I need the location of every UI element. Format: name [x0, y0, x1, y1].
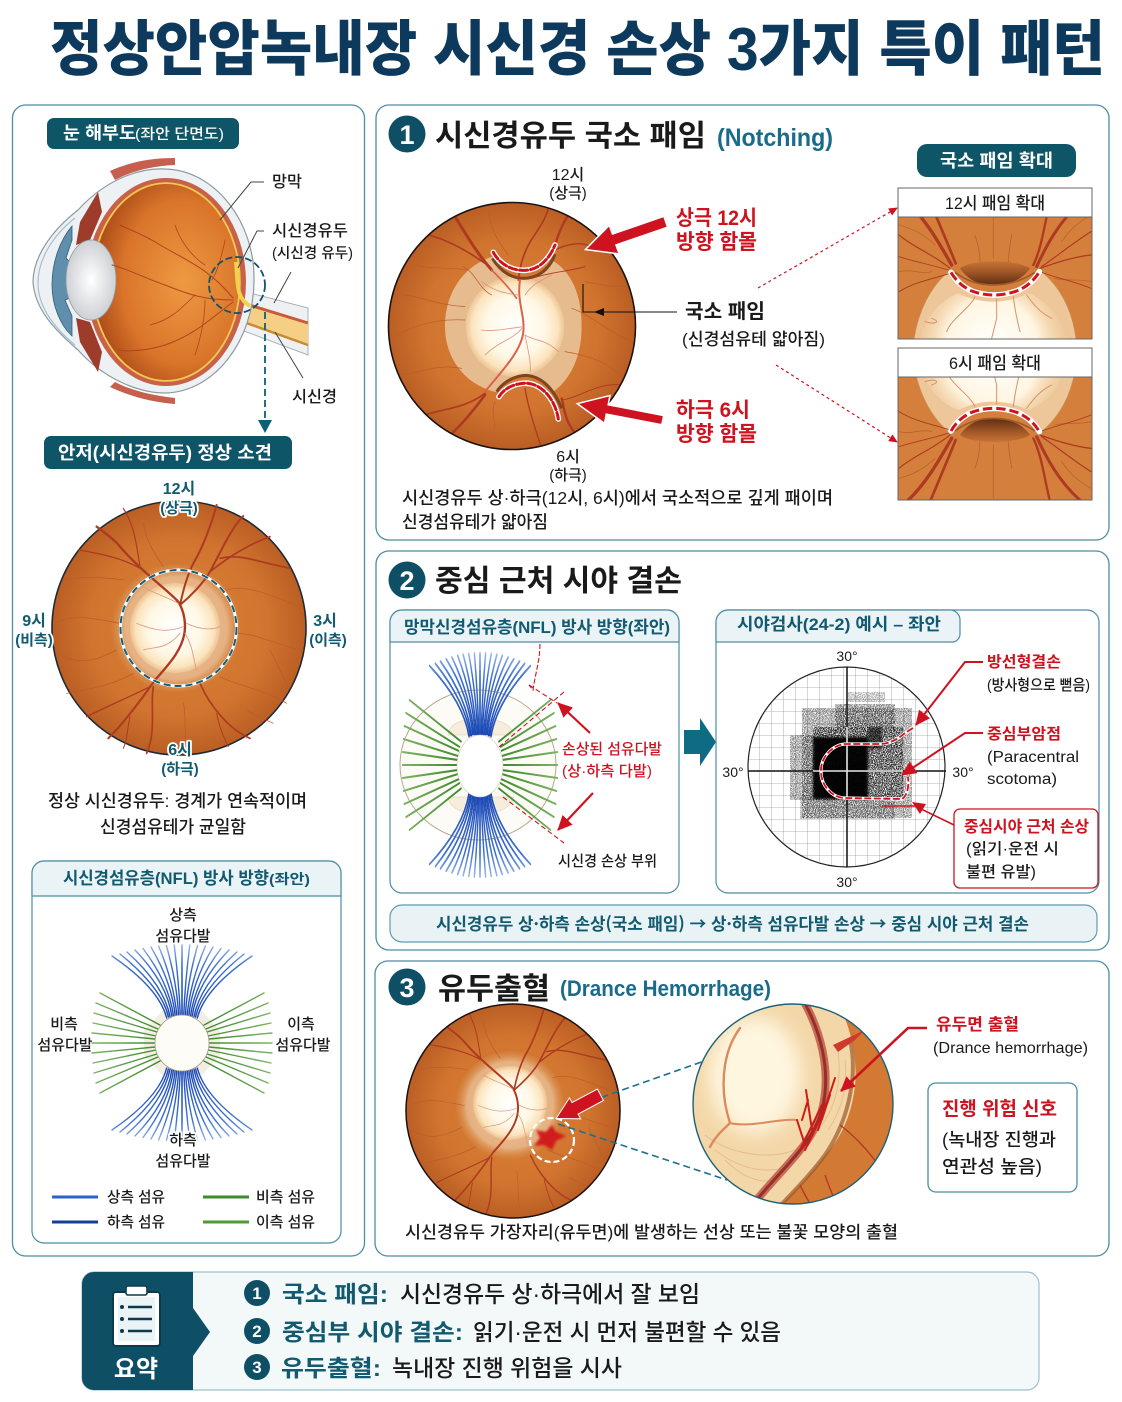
summary row 2: 읽기·운전 시 먼저 불편할 수 있음 — [473, 1319, 781, 1345]
callouts: anatomy labels: 망막 — [272, 173, 302, 191]
text: notch description — [402, 488, 833, 532]
heading: eye anatomy: 눈 해부도 — [63, 123, 136, 143]
icon: clipboard checklist — [113, 1286, 160, 1346]
callout: paracentral scotoma — [902, 725, 1079, 788]
summary row 3: 녹내장 진행 위험을 시사 — [392, 1355, 622, 1381]
callout: upper notch: 상극 12시 — [676, 207, 757, 230]
callouts: anatomy labels: 시신경유두 — [272, 222, 348, 240]
callouts: anatomy labels: 시신경 — [292, 388, 337, 406]
diagram: damaged fibers — [400, 644, 564, 877]
legend: 상측 섬유 — [107, 1189, 165, 1206]
heading 1 — [388, 116, 833, 153]
fan labels: 비측 — [50, 1016, 78, 1033]
clock labels: 6시 — [168, 742, 192, 759]
callout: near-central damage: 중심시야 근처 손상 — [964, 818, 1089, 836]
heading 1: 시신경유두 국소 패임 — [435, 120, 706, 153]
clock labels: (비측) — [15, 632, 53, 649]
callout: hemorrhage label: (Drance hemorrhage) — [933, 1040, 1088, 1057]
clock labels: 9시 — [22, 613, 46, 630]
field axis labels: 30° — [836, 648, 858, 664]
labels: damaged bundles: (상·하측 다발) — [562, 763, 652, 780]
clock labels: 6시 — [556, 449, 580, 466]
callout: focal notch: (신경섬유테 얇아짐) — [682, 330, 825, 349]
heading: notch zoom: 국소 패임 확대 — [940, 151, 1053, 171]
legend: 이측 섬유 — [256, 1214, 315, 1231]
callout: upper notch — [676, 207, 757, 254]
arrow: fibers to field — [684, 718, 716, 766]
legend: 하측 섬유 — [107, 1214, 165, 1231]
callout: lower notch: 방향 함몰 — [676, 423, 757, 446]
fan labels: 상측 — [169, 907, 197, 924]
callout: paracentral scotoma: 중심부암점 — [987, 725, 1061, 743]
clock labels: 12시 — [552, 167, 584, 184]
callout: near-central damage: 불편 유발) — [966, 863, 1036, 881]
callout: progression risk: (녹내장 진행과 — [942, 1130, 1056, 1150]
heading: eye anatomy: (좌안 단면도) — [135, 126, 224, 143]
fundus: normal optic disc — [52, 501, 306, 755]
fan labels: 하측 — [169, 1132, 197, 1149]
sub-panel: NFL damage — [390, 610, 679, 893]
clock labels: (상극) — [549, 185, 587, 202]
arrows: damaged bundles — [558, 703, 593, 830]
text: normal fundus description: 신경섬유테가 균일함 — [100, 817, 246, 837]
callouts: anatomy labels — [220, 173, 353, 406]
callouts: anatomy labels: (시신경 유두) — [272, 245, 353, 262]
panel 1: focal notching — [376, 105, 1109, 540]
heading 3: (Drance Hemorrhage) — [560, 976, 771, 1001]
callout: paracentral scotoma: (Paracentral — [987, 749, 1079, 766]
sub-panel: NFL damage: 망막신경섬유층(NFL) 방사 방향(좌안) — [404, 618, 670, 637]
clock labels: (하극) — [161, 761, 199, 778]
summary row 2 — [244, 1318, 781, 1345]
arrow: hemorrhage — [557, 1090, 603, 1118]
summary row 2: 중심부 시야 결손: — [282, 1319, 463, 1345]
summary row 1: 국소 패임: — [282, 1281, 388, 1307]
fundus: notched disc — [388, 202, 636, 450]
labels: damaged bundles — [558, 741, 662, 870]
summary tab: 요약 — [114, 1356, 158, 1383]
heading 3: 유두출혈 — [438, 973, 550, 1006]
fan labels: 섬유다발 — [155, 928, 211, 945]
clock labels: (상극) — [160, 500, 198, 517]
callout: focal notch: 국소 패임 — [685, 300, 765, 323]
heading 2: 2 — [399, 566, 415, 596]
fan labels — [37, 907, 331, 1170]
callout: near-central damage: (읽기·운전 시 — [966, 840, 1059, 858]
clock labels: (이측) — [309, 632, 347, 649]
callout: progression risk: 진행 위험 신호 — [942, 1098, 1057, 1120]
arrows: dotted to zooms — [758, 208, 897, 442]
panel: NFL radial direction: (좌안) — [269, 871, 310, 887]
clock labels: 3시 — [313, 613, 337, 630]
arrow: upper notch — [587, 217, 667, 253]
callout: paracentral scotoma: scotoma) — [987, 771, 1057, 788]
summary row 1: 시신경유두 상·하극에서 잘 보임 — [400, 1281, 700, 1307]
summary row 3 — [244, 1354, 622, 1381]
panel: summary — [82, 1272, 1039, 1390]
arrow: lower notch — [579, 396, 663, 424]
fan labels: 섬유다발 — [155, 1153, 211, 1170]
callout: arcuate defect: (방사형으로 뻗음) — [987, 677, 1090, 694]
summary row 2: 2 — [252, 1322, 262, 1341]
callout: near-central damage — [882, 802, 1098, 888]
callout: hemorrhage label — [841, 1015, 1088, 1091]
summary row 1: 1 — [252, 1284, 262, 1303]
callout: lower notch — [676, 399, 757, 446]
labels: damaged bundles: 시신경 손상 부위 — [558, 853, 657, 870]
text: hemorrhage description: 시신경유두 가장자리(유두면)에 발생하는 선상 또는 불꽃 모양의 출혈 — [405, 1223, 898, 1242]
summary tab — [82, 1272, 210, 1390]
heading: normal fundus: 안저(시신경유두) 정상 소견 — [58, 443, 272, 463]
text: notch description: 시신경유두 상·하극(12시, 6시)에서 국소적으로 깊게 패이며 — [402, 488, 833, 508]
lines: zoom connectors — [558, 1060, 727, 1180]
legend: 비측 섬유 — [256, 1189, 315, 1206]
heading: normal fundus — [44, 436, 292, 469]
zoom: 12 o'clock — [895, 188, 1098, 345]
panel 2: paracentral field loss — [376, 551, 1109, 950]
text: normal fundus description — [48, 791, 307, 837]
callout: lower notch: 하극 6시 — [676, 399, 750, 422]
illustration: eye cross-section — [33, 158, 308, 404]
fan labels: 섬유다발 — [37, 1037, 93, 1054]
summary row 3: 3 — [252, 1358, 262, 1377]
panel: left anatomy column — [12, 105, 364, 1256]
summary strip: damage chain: 시신경유두 상·하측 손상(국소 패임) → 상·하측 섬유다발 손상 → 중심 시야 근처 결손 — [436, 910, 1029, 935]
field axis labels — [722, 648, 974, 890]
fan labels: 이측 — [287, 1016, 315, 1033]
arrow: anatomy to fundus — [258, 312, 272, 433]
text: normal fundus description: 정상 시신경유두: 경계가 연속적이며 — [48, 791, 307, 811]
callout: focal notch — [583, 284, 825, 349]
callout: hemorrhage label: 유두면 출혈 — [936, 1015, 1019, 1034]
labels: damaged bundles: 손상된 섬유다발 — [562, 741, 662, 758]
summary strip: damage chain — [390, 905, 1097, 942]
field axis labels: 30° — [836, 874, 858, 890]
legend — [52, 1189, 315, 1231]
panel 3: disc hemorrhage — [375, 961, 1109, 1256]
callout: arcuate defect — [916, 653, 1090, 725]
heading 3 — [388, 968, 771, 1006]
zoom: 6 o'clock: 6시 패임 확대 — [949, 354, 1041, 373]
callout: progression risk — [928, 1083, 1077, 1192]
chart: 24-2 field map — [747, 666, 946, 868]
heading 1: (Notching) — [717, 124, 833, 152]
clock labels: 12시 — [163, 481, 195, 498]
heading: notch zoom — [917, 144, 1076, 177]
field axis labels: 30° — [722, 764, 744, 780]
text: notch description: 신경섬유테가 얇아짐 — [402, 512, 548, 532]
callout: progression risk: 연관성 높음) — [942, 1157, 1042, 1177]
sub-panel: visual field — [716, 610, 1099, 893]
sub-panel: visual field: 시야검사(24-2) 예시 – 좌안 — [737, 615, 941, 634]
heading 2: 중심 근처 시야 결손 — [435, 565, 682, 598]
panel: NFL radial direction — [32, 861, 341, 1243]
fan labels: 섬유다발 — [275, 1037, 331, 1054]
zoom: 6 o'clock — [895, 348, 1098, 505]
clock labels — [15, 481, 347, 778]
heading: eye anatomy — [47, 118, 239, 149]
summary row 3: 유두출혈: — [281, 1355, 381, 1381]
zoom: 12 o'clock: 12시 패임 확대 — [945, 194, 1045, 213]
panel: NFL radial direction: 시신경섬유층(NFL) 방사 방향 — [63, 869, 269, 888]
callout: arcuate defect: 방선형결손 — [987, 653, 1061, 671]
zoom: hemorrhage close-up — [690, 1000, 896, 1210]
heading 1: 1 — [399, 120, 415, 150]
field axis labels: 30° — [952, 764, 974, 780]
clock labels — [549, 167, 587, 484]
clock labels: (하극) — [549, 467, 587, 484]
fundus: disc hemorrhage — [406, 1004, 620, 1218]
callout: upper notch: 방향 함몰 — [676, 231, 757, 254]
heading 3: 3 — [399, 973, 415, 1003]
diagram: NFL fans — [92, 945, 272, 1141]
summary row 1 — [244, 1280, 700, 1307]
